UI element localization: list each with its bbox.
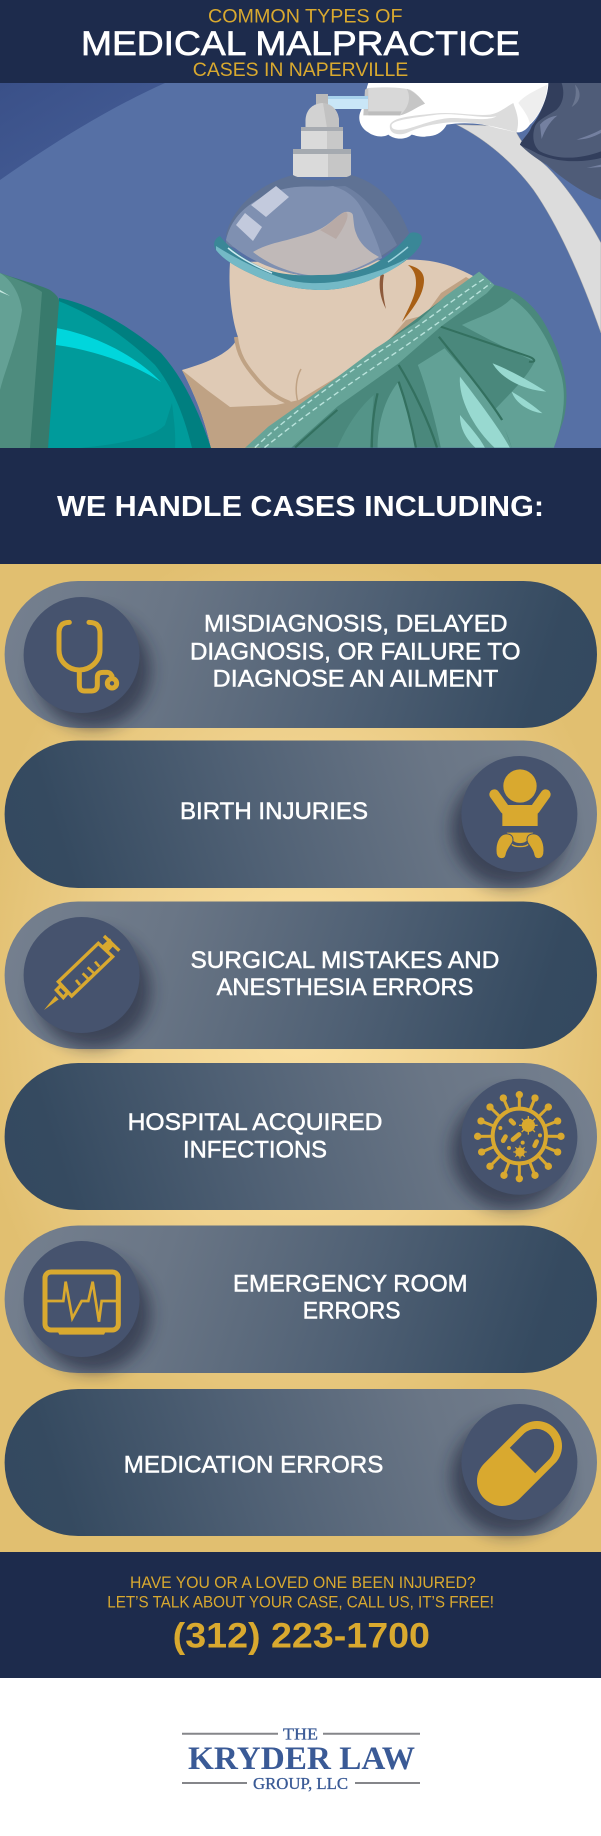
patient shirt: [48, 298, 211, 448]
case 3 text: SURGICAL MISTAKES AND: [190, 947, 499, 974]
logo: The Kryder Law Group: THE: [283, 1724, 318, 1743]
illustration: patient with anesthesia mask: [0, 83, 601, 448]
heading: WE HANDLE CASES INCLUDING:: [57, 491, 544, 523]
mask rim: [214, 232, 422, 290]
case 6: medication errors: [5, 1389, 597, 1536]
header band: [0, 0, 601, 83]
case 1: misdiagnosis: [5, 581, 597, 728]
panel: gold case list: [0, 564, 601, 1552]
cap highlights: [460, 363, 546, 448]
case 2 text: BIRTH INJURIES: [180, 798, 368, 825]
icon: heart monitor: [45, 1272, 118, 1335]
panel: heading band: [0, 448, 601, 564]
cap band: [245, 272, 494, 448]
case 3 text: ANESTHESIA ERRORS: [217, 974, 473, 1001]
breathing tube, sleeve and glove: [359, 83, 601, 333]
icon: stethoscope: [59, 622, 117, 691]
patient sleeve: [0, 273, 59, 448]
case 5 text: EMERGENCY ROOM: [233, 1271, 468, 1298]
surgical cap: [245, 272, 566, 448]
case 4 text: INFECTIONS: [183, 1137, 327, 1164]
case 3: surgical mistakes: [5, 902, 597, 1049]
case 2: birth injuries: [5, 740, 597, 888]
call to action text: LET’S TALK ABOUT YOUR CASE, CALL US, IT’S FREE!: [107, 1593, 494, 1612]
icon: syringe: [44, 936, 119, 1010]
cap fold lines: [295, 327, 534, 448]
case 5 text: ERRORS: [303, 1298, 400, 1325]
eyelashes: [402, 265, 424, 322]
case 4: hospital acquired infections: [5, 1063, 597, 1210]
case 1 text: MISDIAGNOSIS, DELAYED: [204, 611, 507, 638]
icon: virus: [474, 1091, 565, 1182]
icon: baby: [494, 767, 546, 859]
case 1 text: DIAGNOSE AN AILMENT: [213, 666, 499, 693]
logo: The Kryder Law Group: [0, 1678, 601, 1836]
phone number: (312) 223-1700: [173, 1617, 430, 1656]
mask valve: [316, 94, 328, 107]
case 4 text: HOSPITAL ACQUIRED: [128, 1109, 382, 1136]
icon: capsule: [502, 1429, 554, 1481]
face: [182, 260, 480, 448]
header line 3: CASES IN NAPERVILLE: [193, 59, 408, 81]
call to action text: HAVE YOU OR A LOVED ONE BEEN INJURED?: [130, 1573, 476, 1592]
case 6 text: MEDICATION ERRORS: [124, 1452, 383, 1479]
title: MEDICAL MALPRACTICE: [81, 25, 520, 63]
panel: call to action: [0, 1552, 601, 1678]
oxygen tube: [328, 96, 368, 109]
header line 1: COMMON TYPES OF: [208, 6, 403, 28]
mask dome: [226, 175, 409, 277]
logo: The Kryder Law Group: KRYDER LAW: [188, 1741, 415, 1777]
case 5: emergency room errors: [5, 1226, 597, 1373]
logo: The Kryder Law Group: GROUP, LLC: [253, 1774, 348, 1793]
case 1 text: DIAGNOSIS, OR FAILURE TO: [190, 638, 520, 665]
